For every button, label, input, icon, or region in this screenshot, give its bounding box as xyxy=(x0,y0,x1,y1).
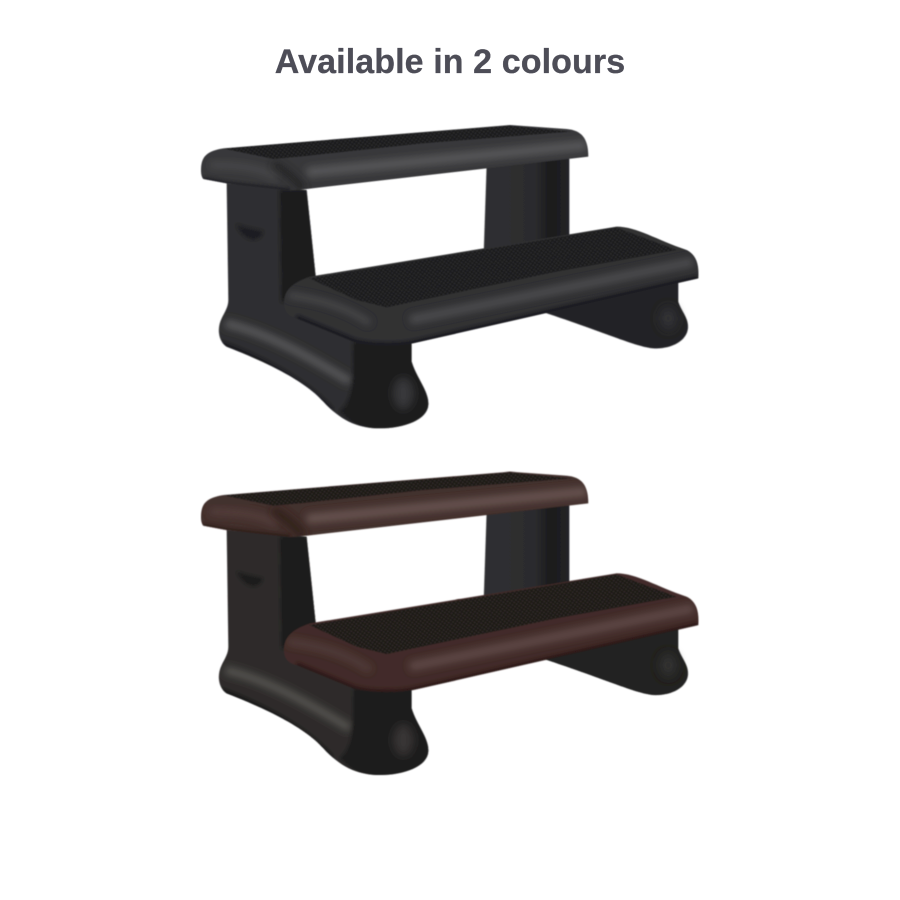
top step xyxy=(201,472,588,537)
product photo: brown step xyxy=(201,472,698,777)
back leg xyxy=(483,158,688,348)
back leg xyxy=(483,505,688,695)
product photo: black step xyxy=(201,125,698,430)
title: Available in 2 colours xyxy=(275,43,625,81)
front leg and base xyxy=(219,183,430,430)
lower step xyxy=(284,573,698,692)
front leg and base xyxy=(219,530,430,777)
lower step xyxy=(284,227,698,346)
top step xyxy=(201,125,588,190)
product photos xyxy=(200,124,700,776)
